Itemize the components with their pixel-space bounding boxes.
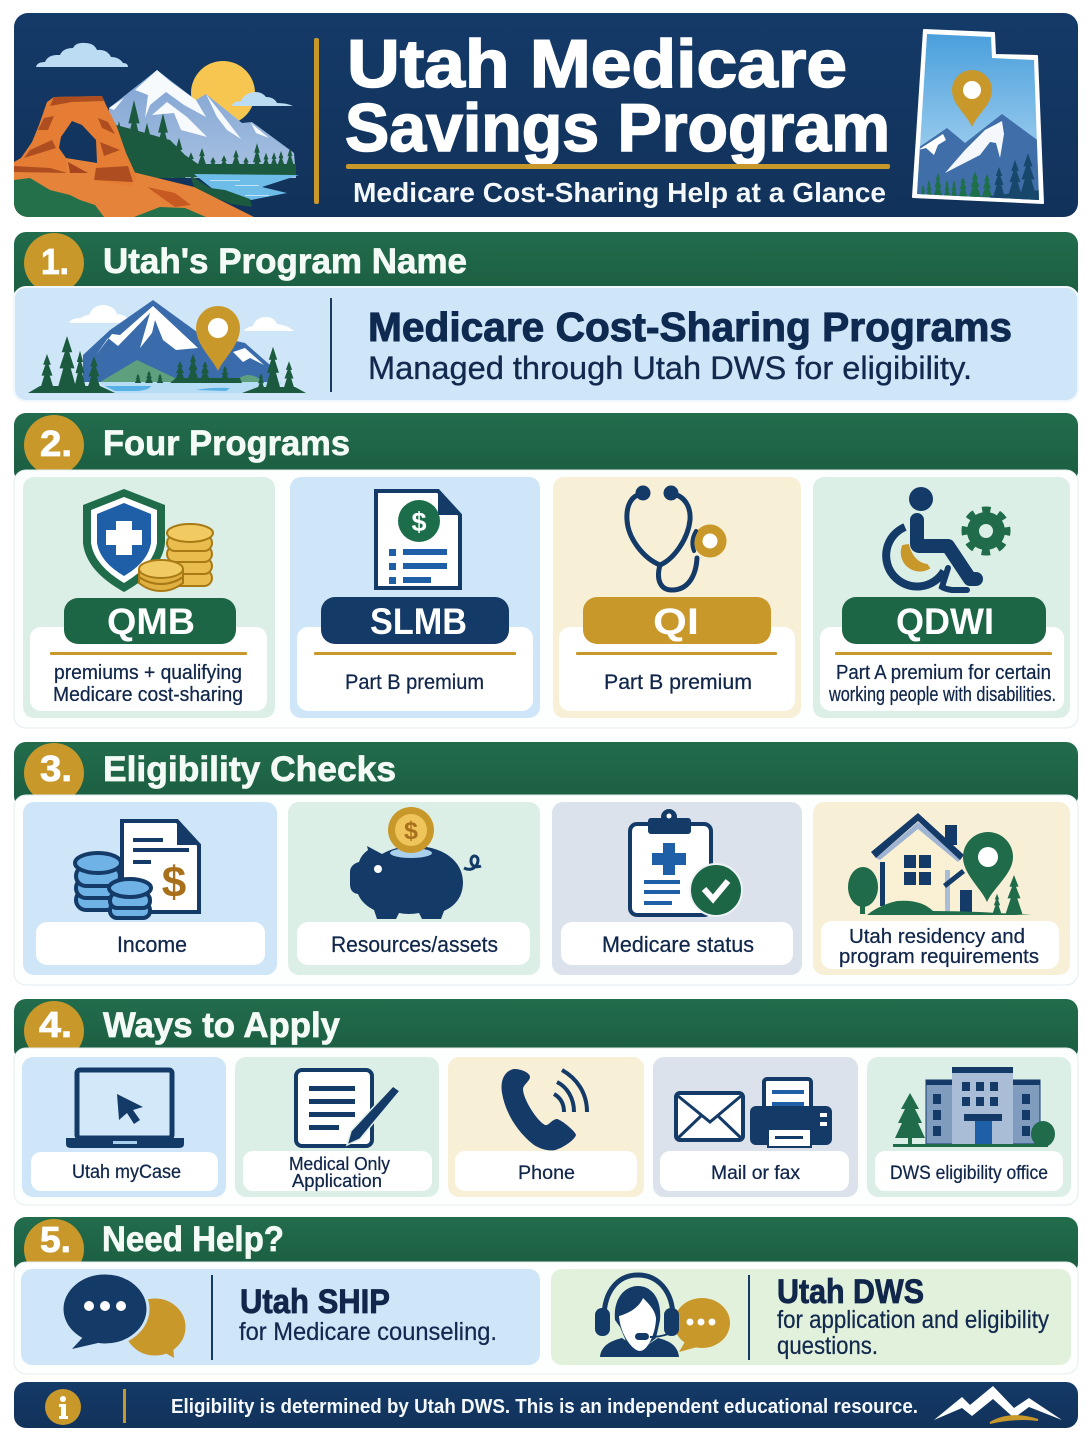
title [345, 26, 890, 166]
title rule [346, 164, 890, 169]
icon: office building [893, 1067, 1055, 1147]
card: QMB: QMB [107, 601, 195, 642]
heading bar 3: 3. [40, 748, 72, 789]
card: Utah myCase [22, 1057, 226, 1197]
label: resources: Resources/assets [331, 932, 498, 957]
heading bar 2 [14, 413, 1078, 483]
heading bar 5: Need Help? [102, 1220, 284, 1259]
icon: mountain logo [934, 1386, 1062, 1423]
heading bar 5: 5. [40, 1219, 71, 1260]
icon: house and pin [848, 813, 1032, 915]
card: QI [553, 477, 801, 718]
card: QDWI: QDWI [896, 601, 994, 642]
icon: piggy bank [350, 807, 481, 919]
icon: mountains and pin [28, 300, 306, 393]
heading bar 4: Ways to Apply [103, 1006, 341, 1045]
card: QDWI [813, 477, 1070, 718]
icon: premium document: $ [411, 507, 427, 537]
QDWI description [828, 662, 1056, 706]
label: DWS office: DWS eligibility office [890, 1163, 1048, 1184]
header banner [14, 13, 1078, 217]
card: Medicare status [552, 802, 802, 975]
DWS description [777, 1306, 1049, 1360]
heading bar 1: 1. [41, 241, 69, 282]
card: SLMB [290, 477, 540, 718]
icon: premium document [376, 491, 460, 588]
subtitle: Medicare Cost-Sharing Help at a Glance [353, 177, 886, 208]
card: mail or fax [653, 1057, 858, 1197]
icon: coins and document [75, 821, 199, 918]
heading bar 2: Four Programs [103, 424, 350, 463]
icon: piggy bank: $ [404, 817, 418, 845]
label: income: Income [117, 932, 187, 957]
panel background 3 [14, 795, 1078, 985]
panel background 4 [14, 1048, 1078, 1205]
QI description: Part B premium [604, 671, 752, 694]
section 1: Utah's Program Name [14, 232, 1078, 401]
card: residency [813, 802, 1070, 975]
SLMB description: Part B premium [345, 671, 484, 694]
card: resources [288, 802, 540, 975]
label: Medical Only Application: Application [292, 1171, 382, 1191]
label: Medical Only Application: Medical Only [289, 1154, 390, 1174]
heading bar 2: 2. [40, 423, 72, 464]
label: residency: Utah residency and [849, 926, 1025, 948]
card: QI: QI [653, 601, 699, 642]
label: residency [839, 926, 1039, 968]
section 2: Four Programs [14, 413, 1078, 728]
icon: form and pen [296, 1070, 400, 1146]
card: Utah DWS [551, 1269, 1071, 1365]
heading bar 1 [14, 232, 1078, 302]
heading bar 4 [14, 999, 1078, 1061]
program name text: Medicare Cost-Sharing Programs [368, 304, 1012, 350]
QMB description [53, 662, 243, 706]
heading bar 3: Eligibility Checks [103, 750, 396, 789]
heading bar 3 [14, 742, 1078, 801]
badge: SLMB [321, 597, 509, 644]
badge: QMB [64, 598, 236, 644]
icon: info [45, 1389, 81, 1425]
panel: program name [14, 287, 1078, 401]
QMB description: Medicare cost-sharing [53, 684, 243, 706]
panel background 2 [14, 470, 1078, 728]
program description: Managed through Utah DWS for eligibility. [368, 350, 972, 386]
icon: clipboard and check [630, 809, 742, 916]
card: SLMB: SLMB [370, 601, 467, 642]
QDWI description: Part A premium for certain [836, 662, 1051, 684]
icon: phone [502, 1069, 587, 1150]
DWS heading: Utah DWS [777, 1273, 924, 1311]
card: Medical Only Application [235, 1057, 439, 1197]
icon: support agent [595, 1275, 730, 1357]
disclaimer: Eligibility is determined by Utah DWS. This is an independent educational resource. [171, 1396, 918, 1418]
label: residency: program requirements [839, 946, 1039, 968]
title: Savings Program [345, 90, 890, 166]
card: DWS office [867, 1057, 1071, 1197]
DWS description: questions. [777, 1332, 878, 1360]
footer bar [14, 1382, 1078, 1428]
section 3: Eligibility Checks [14, 742, 1078, 985]
heading bar 5 [14, 1217, 1078, 1279]
card: phone [448, 1057, 644, 1197]
card: Utah SHIP [21, 1269, 540, 1365]
divider [314, 38, 319, 204]
label: Medical Only Application [289, 1154, 390, 1191]
icon: laptop [66, 1070, 184, 1148]
section 4: Ways to Apply [14, 999, 1078, 1205]
icon: stethoscope [627, 488, 722, 590]
title: Utah Medicare [347, 26, 847, 102]
label: phone: Phone [518, 1163, 575, 1184]
badge: QI [583, 597, 771, 644]
illustration: Utah landscape with arch [14, 43, 299, 217]
icon: wheelchair and gear [886, 487, 1007, 590]
badge: QDWI [842, 597, 1046, 644]
label: Medicare status: Medicare status [602, 932, 754, 957]
SHIP description: for Medicare counseling. [239, 1318, 497, 1346]
card: QMB [23, 477, 275, 718]
heading bar 1: Utah's Program Name [103, 242, 467, 281]
icon: shield and coins [83, 489, 213, 592]
panel background 5 [14, 1262, 1078, 1374]
icon: speech bubbles [62, 1273, 187, 1358]
heading bar 4: 4. [39, 1004, 72, 1045]
QMB description: premiums + qualifying [54, 662, 242, 684]
SHIP heading: Utah SHIP [240, 1283, 390, 1321]
label: Utah myCase: Utah myCase [72, 1162, 181, 1183]
card: income [23, 802, 277, 975]
section 5: Need Help? [14, 1217, 1078, 1374]
DWS description: for application and eligibility [777, 1306, 1049, 1334]
icon: envelope and fax [676, 1079, 832, 1147]
label: mail or fax: Mail or fax [711, 1163, 801, 1184]
icon: coins and document: $ [162, 858, 186, 907]
icon: Utah map with pin [913, 30, 1043, 205]
